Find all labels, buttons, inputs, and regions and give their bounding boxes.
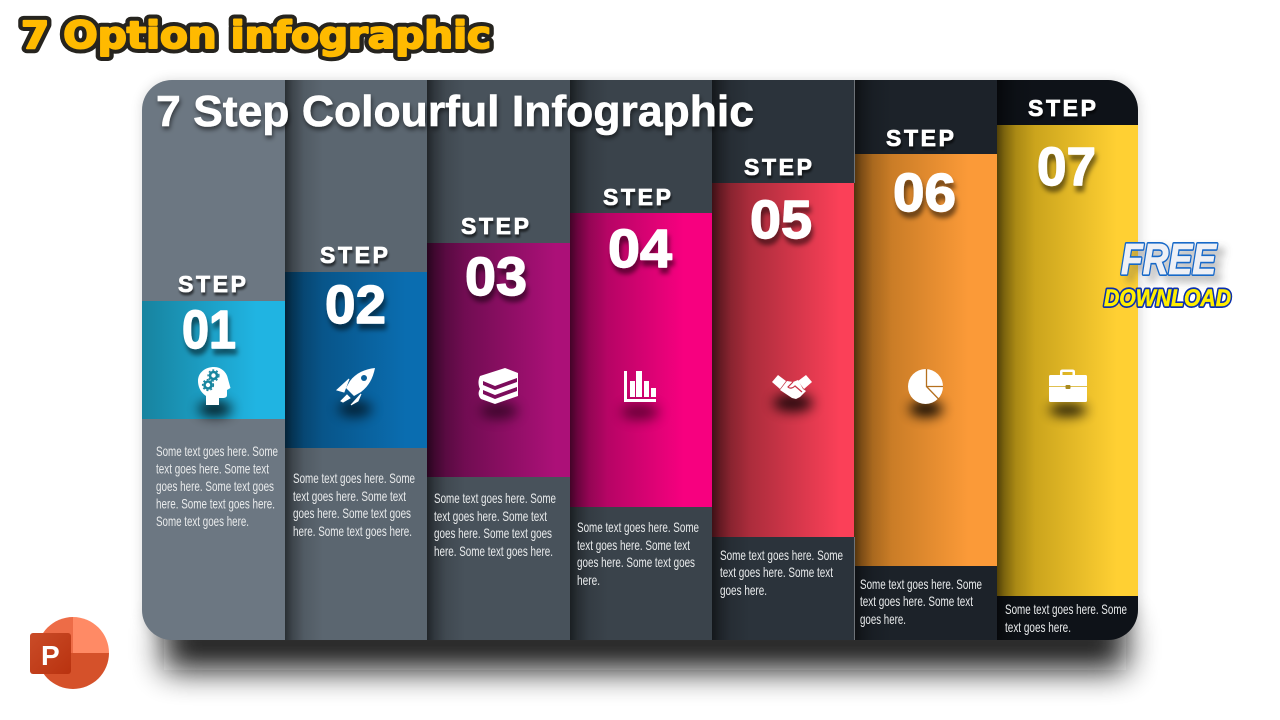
text: step 3 description (434, 490, 556, 559)
badge: free download: DOWNLOAD (1104, 285, 1231, 312)
panel: step 1: 01 (182, 300, 236, 360)
text: step 4 description (577, 519, 699, 588)
panel: step 5 (712, 80, 854, 640)
badge: free download: DOWNLOAD (1104, 285, 1231, 312)
panel: step 2: STEP (320, 242, 388, 268)
panel: step 7: 07 (1037, 137, 1096, 197)
panel: step 7 (997, 80, 1138, 640)
text: step 7 description: Some text goes here. Some (1005, 601, 1127, 617)
badge: free download: FREE (1121, 235, 1217, 284)
icon: PowerPoint logo: P (41, 640, 60, 671)
panel: step 6 (854, 80, 997, 640)
icon: handshake (772, 375, 813, 412)
text: step 2 description: Some text goes here. Some (293, 470, 415, 486)
text: step 6 description: goes here. (860, 611, 906, 627)
panel: step 3 (427, 80, 570, 640)
text: step 5 description (720, 547, 843, 598)
icon: books (478, 368, 518, 419)
text: step 4 description: Some text goes here. Some (577, 519, 699, 535)
panel: step 5: 05 (750, 190, 812, 250)
text: step 2 description: text goes here. Some text (293, 488, 406, 504)
text: step 5 description: Some text goes here. Some (720, 547, 843, 563)
text: step 2 description (293, 470, 415, 539)
panel: step 4: STEP (603, 184, 671, 210)
badge: free download: FREE (1121, 235, 1217, 284)
panel: step 5: STEP (744, 154, 812, 180)
panel: step 6: STEP (886, 125, 954, 151)
text: step 3 description: Some text goes here. Some (434, 490, 556, 506)
icon: rocket (337, 368, 375, 417)
text: step 2 description: here. Some text goes here. (293, 523, 412, 539)
panel: step 1 (142, 80, 285, 640)
text: step 1 description: goes here. Some text goes (156, 478, 274, 494)
panel: step 3: 03 (465, 247, 527, 307)
text: step 3 description: here. Some text goes here. (434, 543, 553, 559)
icon: head with gears (198, 367, 232, 417)
panel: step 6: 06 (893, 163, 956, 223)
text: step 3 description: text goes here. Some text (434, 508, 547, 524)
panel: step 4 (570, 80, 712, 640)
text: step 1 description: Some text goes here. Some (156, 443, 278, 459)
text: step 5 description: text goes here. Some text (720, 564, 833, 580)
panel: step 4: 04 (608, 219, 672, 279)
badge: free download (1104, 235, 1231, 312)
text: step 6 description (860, 576, 982, 627)
panel: step 2: 02 (325, 275, 386, 335)
text: step 5 description: goes here. (720, 582, 767, 598)
heading: 7 Option infographic: 7 Option infographic (21, 14, 491, 57)
text: step 4 description: here. (577, 572, 600, 588)
panel: step 7: STEP (1028, 95, 1096, 121)
text: step 2 description: goes here. Some text goes (293, 505, 411, 521)
icon: pie chart (908, 369, 943, 417)
heading: 7 Option infographic: 7 Option infographic (21, 14, 491, 57)
card title: 7 Step Colourful Infographic (156, 87, 754, 136)
text: step 4 description: goes here. Some text goes (577, 554, 695, 570)
panel: step 3: STEP (461, 213, 529, 239)
text: step 1 description: here. Some text goes here. (156, 496, 275, 512)
infographic card (142, 80, 1138, 640)
text: step 1 description (156, 443, 278, 529)
text: step 1 description: text goes here. Some text (156, 460, 269, 476)
panel: step 1: STEP (178, 271, 246, 297)
icon: bar chart (621, 371, 659, 420)
icon: PowerPoint logo (30, 617, 109, 689)
text: step 1 description: Some text goes here. (156, 513, 249, 529)
text: step 6 description: Some text goes here. Some (860, 576, 982, 592)
panel: step 2 (285, 80, 427, 640)
text: step 6 description: text goes here. Some text (860, 593, 973, 609)
text: step 7 description: text goes here. (1005, 619, 1071, 635)
text: step 3 description: goes here. Some text goes (434, 525, 552, 541)
text: step 4 description: text goes here. Some text (577, 537, 690, 553)
text: step 7 description (1005, 601, 1127, 635)
icon: briefcase (1049, 370, 1087, 416)
card drop shadow (142, 80, 1140, 670)
